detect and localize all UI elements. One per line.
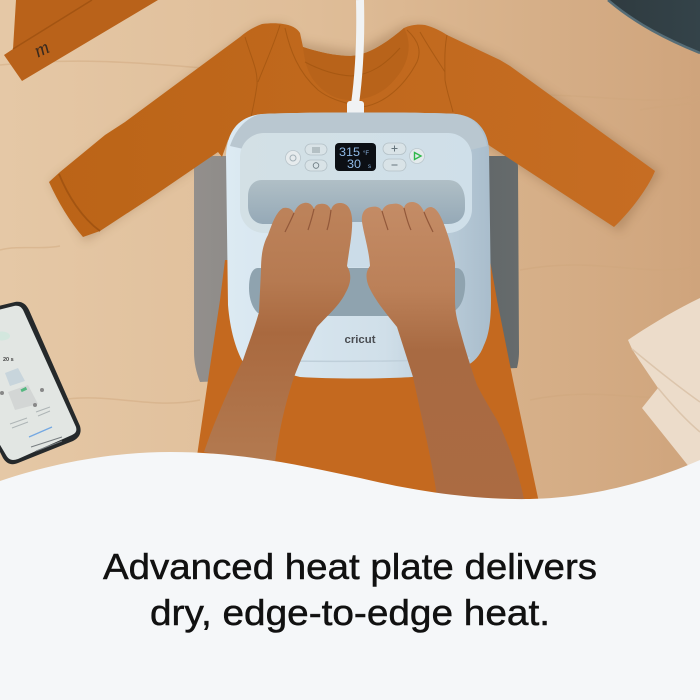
mode button [305, 144, 327, 155]
caption heading [103, 546, 597, 633]
lower lid crease [250, 358, 470, 361]
handle well, upper [248, 180, 465, 224]
temperature unit: °F [363, 151, 369, 157]
timer button [305, 160, 327, 171]
cricut logo: cricut [344, 334, 376, 346]
handle well, lower [249, 268, 465, 316]
press lid top band [230, 112, 487, 150]
center handle strip [345, 222, 373, 267]
control panel [240, 133, 472, 233]
time reading: 30 [347, 159, 361, 171]
phone screen [0, 306, 76, 460]
right arm and hand [362, 202, 524, 499]
left sleeve cuff [59, 174, 100, 231]
digital display [335, 143, 376, 171]
power cord [347, 0, 364, 122]
orange bodysuit [49, 23, 655, 510]
white wave caption panel [0, 452, 700, 700]
left arm and hand [204, 203, 352, 463]
plus button [383, 143, 406, 154]
time unit: s [368, 164, 371, 170]
bodysuit torso and sleeves [49, 23, 655, 237]
right knuckle creases [382, 208, 433, 232]
inner neck [303, 28, 409, 100]
collar and seams [245, 25, 453, 122]
timer label on phone: 20 s [3, 357, 14, 363]
press body [226, 112, 491, 378]
heat press [226, 112, 491, 378]
grey pressing mat [194, 156, 519, 382]
left knuckle creases [285, 209, 331, 232]
hat band fold [13, 0, 92, 49]
dark object, top right corner [608, 0, 700, 53]
temperature reading: 315 [339, 147, 360, 159]
phone link [29, 427, 52, 437]
press illustration on phone [0, 368, 44, 410]
caption line two: dry, edge-to-edge heat. [150, 592, 550, 633]
soft shirt shadow [50, 24, 661, 242]
start button [410, 148, 424, 164]
phone status pill [0, 332, 10, 340]
phone text lines [10, 407, 50, 428]
power button [286, 150, 300, 166]
minus button [383, 159, 406, 171]
folded muslin cloth [628, 298, 700, 468]
smartphone [0, 302, 81, 464]
bodysuit lower body [195, 260, 542, 510]
caption line one: Advanced heat plate delivers [103, 546, 597, 587]
beanie hat, top left [4, 0, 158, 81]
hat monogram: m [31, 36, 53, 62]
phone footer text [31, 437, 62, 451]
